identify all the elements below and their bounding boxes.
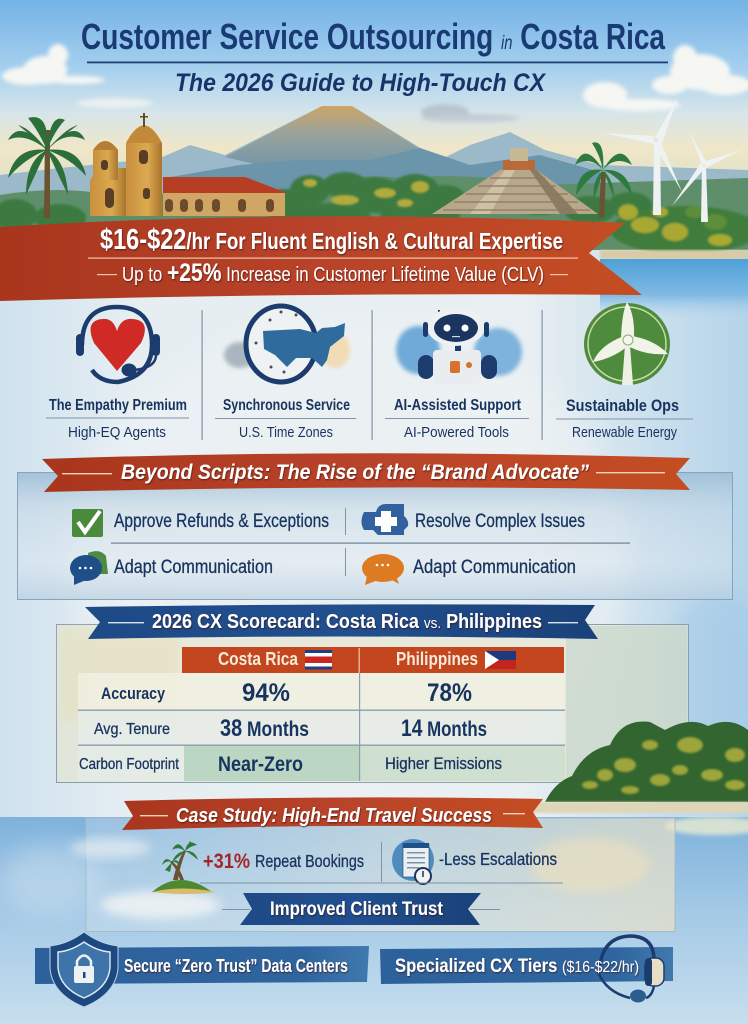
label: Empathy Premium: [46, 397, 189, 441]
row: carbon: Near-Zero: [218, 753, 303, 776]
ribbon: scorecard: [85, 604, 598, 639]
text: repeat bookings: [203, 850, 364, 873]
ribbon: improved client trust: Improved Client Trust: [270, 898, 443, 920]
label: Empathy Premium: The Empathy Premium: [49, 397, 187, 414]
text: CX tiers: Specialized CX Tiers ($16-$22/hr): [395, 956, 639, 977]
icon: blue chat bubbles: [70, 551, 108, 585]
row: tenure: 14 Months: [401, 715, 487, 742]
icon: green turbine globe: [584, 302, 670, 385]
panel: scorecard: [56, 624, 688, 782]
label: Synchronous Service: Synchronous Service: [223, 397, 350, 414]
label: Sustainable Ops: Sustainable Ops: [566, 397, 679, 415]
icon: robot: [396, 308, 522, 384]
label: AI-Assisted Support: [385, 397, 529, 441]
text: less escalations: -Less Escalations: [439, 849, 557, 869]
table header: Philippines: [396, 649, 478, 669]
title: Customer Service Outsourcing in Costa Rica: [81, 16, 666, 57]
label: AI-Assisted Support: AI-Assisted Support: [394, 397, 522, 414]
divider: [542, 310, 543, 440]
church: [90, 113, 287, 216]
label: Sustainable Ops: Renewable Energy: [572, 425, 678, 441]
row: carbon: Carbon Footprint: [79, 756, 180, 773]
beach and water: [600, 250, 748, 319]
bushes right: [610, 204, 748, 254]
ribbon: beyond scripts: Beyond Scripts: The Rise of the “Brand Advocate”: [121, 461, 589, 484]
bushes on beach: [530, 721, 748, 813]
icon: document with clock: [392, 839, 434, 884]
label: Synchronous Service: [215, 397, 356, 441]
row: tenure: [94, 715, 487, 742]
divider: [372, 310, 373, 440]
icon: orange chat bubble: [362, 554, 404, 585]
label: Empathy Premium: High-EQ Agents: [68, 425, 166, 441]
ribbon CLV line: Up to +25% Increase in Customer Lifetime Value (CLV): [122, 259, 544, 287]
row: accuracy: Accuracy: [101, 684, 165, 703]
icon: puzzle with cross: [362, 504, 408, 535]
icon: Costa Rica flag: [305, 650, 332, 670]
label: Sustainable Ops: [556, 397, 693, 441]
icon: Philippines flag: [485, 651, 516, 669]
text: adapt communication left: Adapt Communication: [114, 557, 273, 578]
text: resolve issues: Resolve Complex Issues: [415, 511, 585, 532]
row: tenure: Avg. Tenure: [94, 721, 170, 738]
bar: zero trust: [35, 946, 369, 984]
row: accuracy: [101, 679, 472, 707]
text: approve refunds: Approve Refunds & Exceptions: [114, 511, 329, 532]
ribbon: beyond scripts: [42, 453, 690, 492]
panel: case study: [70, 818, 675, 932]
icon: shield with padlock: [50, 932, 118, 1007]
icon: heart with headset: [76, 307, 160, 382]
scene: mountains and forest: [0, 106, 748, 250]
subtitle: The 2026 Guide to High-Touch CX: [175, 69, 546, 97]
row: tenure: 38 Months: [220, 715, 309, 742]
bar: zero trust: Secure “Zero Trust” Data Centers: [124, 956, 348, 976]
table rows: [78, 673, 565, 781]
main ribbon: [0, 216, 642, 301]
icon: green check: [72, 509, 103, 537]
ribbon price line: $16-$22/hr For Fluent English & Cultural Expertise: [100, 224, 563, 256]
pyramid: [432, 148, 598, 214]
ribbon: case study: [122, 797, 543, 830]
icon: island: [152, 841, 217, 894]
row: carbon: Higher Emissions: [385, 754, 502, 773]
label: Synchronous Service: U.S. Time Zones: [239, 425, 333, 441]
palm tree left: [8, 117, 86, 218]
divider: [202, 310, 203, 440]
bar: CX tiers: [380, 947, 673, 984]
text: adapt communication right: Adapt Communication: [413, 557, 576, 578]
text: repeat bookings: Repeat Bookings: [255, 851, 364, 871]
wind turbines: [603, 97, 741, 222]
table header: [182, 647, 564, 673]
palm tree right: [575, 142, 632, 218]
title rule: [87, 62, 668, 63]
label: AI-Assisted Support: AI-Powered Tools: [404, 425, 509, 441]
icon: headset: [598, 936, 664, 1002]
row: accuracy: 78%: [427, 679, 472, 707]
icon: clock with US map: [224, 306, 350, 382]
ribbon: scorecard: 2026 CX Scorecard: Costa Rica vs. Philippines: [152, 611, 542, 633]
row: accuracy: 94%: [242, 679, 290, 707]
row: carbon: [79, 753, 502, 776]
panel: brand advocate: [18, 472, 732, 600]
text: repeat bookings: +31%: [203, 850, 250, 873]
ribbon: case study: Case Study: High-End Travel Success: [176, 805, 492, 827]
ribbon: improved client trust: [240, 893, 481, 925]
clouds: [2, 44, 748, 122]
table header: Costa Rica: [218, 649, 299, 669]
